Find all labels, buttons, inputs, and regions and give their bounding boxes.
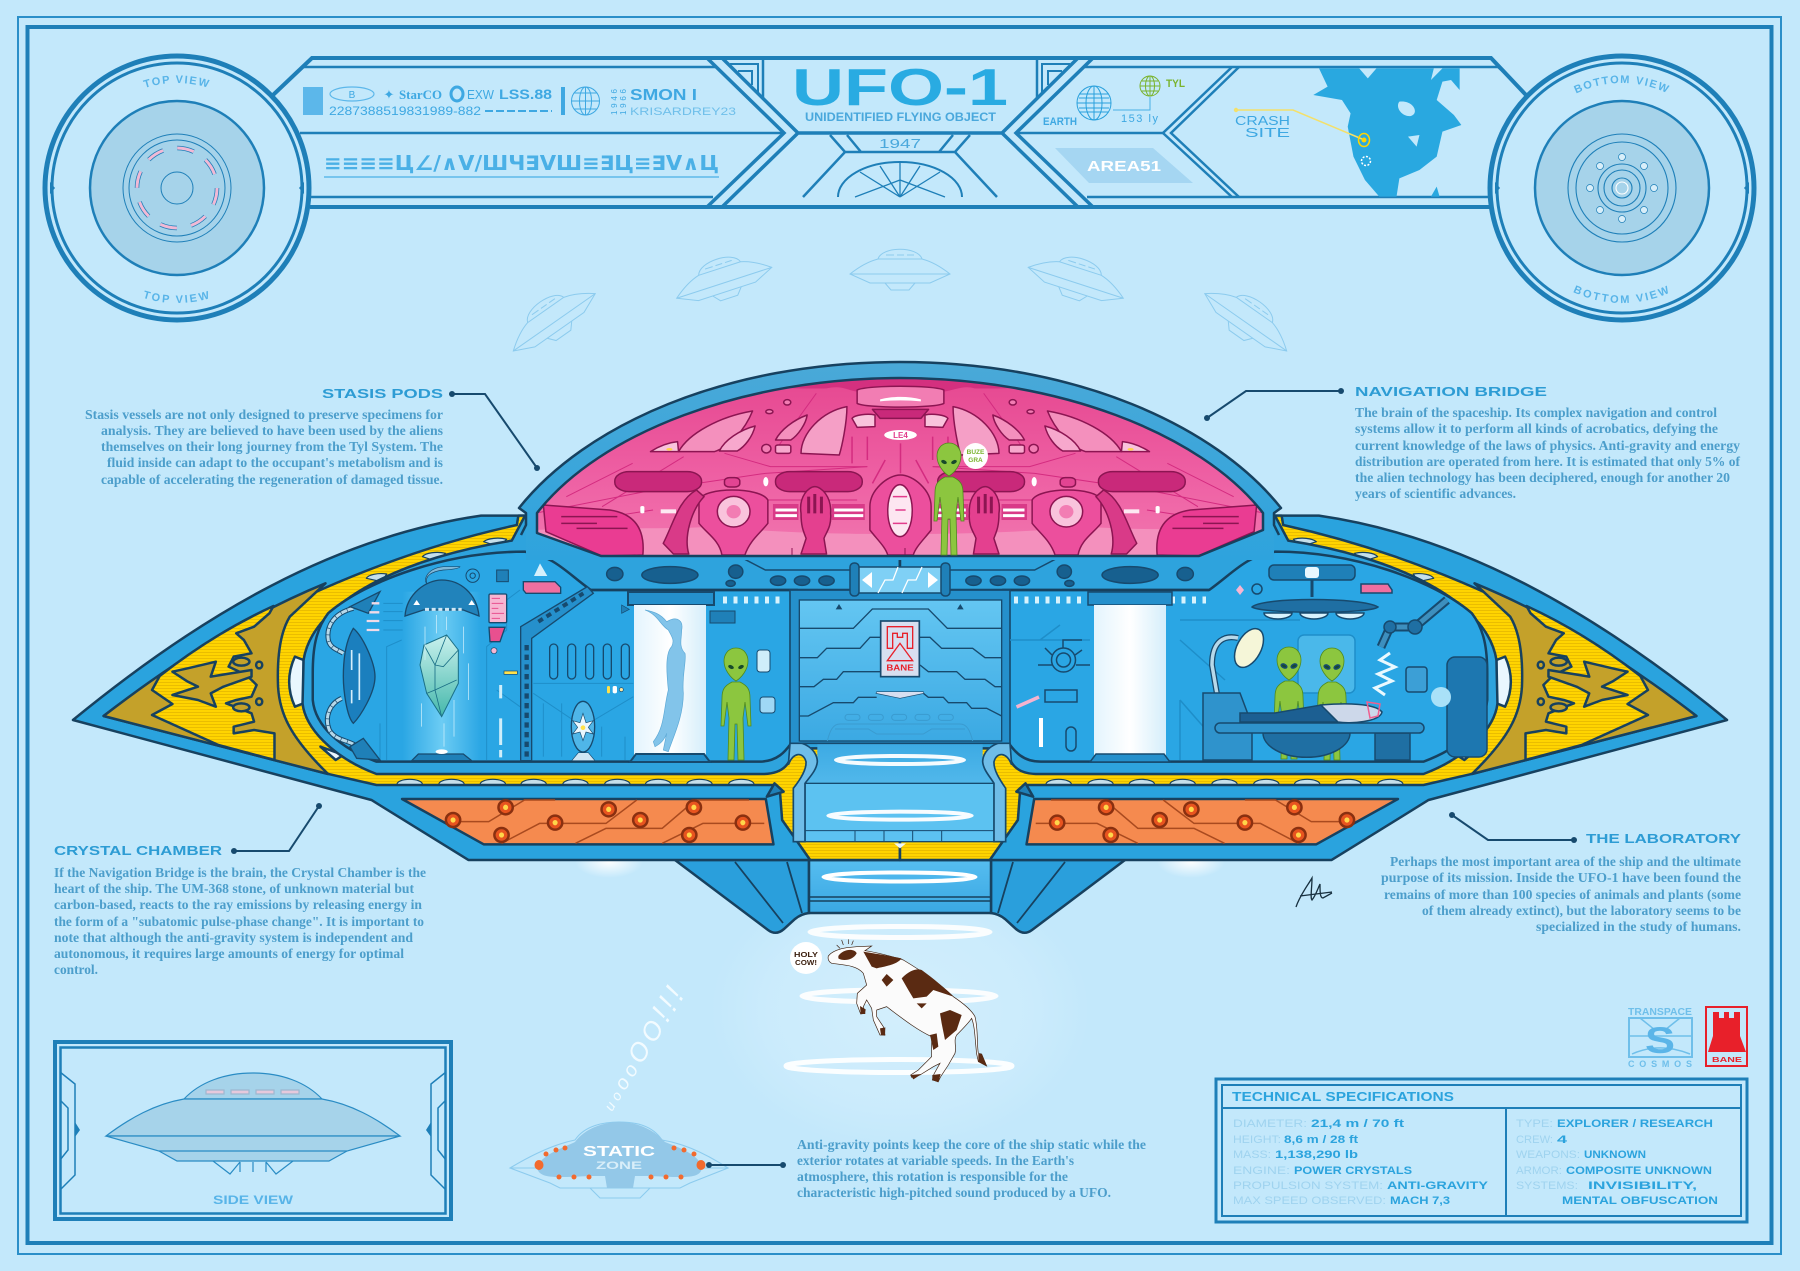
static zone diagram: STATIC [583, 1143, 655, 1160]
specs left column [1233, 1118, 1489, 1207]
central room with logo [790, 590, 1010, 743]
cow [828, 939, 987, 1082]
map of north america with crash site: SITE [1245, 125, 1290, 140]
bottom view circle: BOTTOM VIEW [1574, 75, 1670, 94]
navigation dome [519, 362, 1281, 560]
shield emblem [571, 701, 595, 761]
anti-gravity text: characteristic high-pitched sound produced by a UFO. [797, 1185, 1111, 1200]
transpace cosmos logo: S [1645, 1020, 1675, 1061]
side view panel [55, 1042, 451, 1219]
robotic arm [1381, 600, 1447, 647]
alien speech bubble: BUZE [967, 449, 985, 456]
stasis tube left with specimen [628, 592, 714, 762]
specs right column: INVISIBILITY, [1588, 1180, 1697, 1192]
header: company codes: 1946 [610, 88, 619, 115]
specs right column: MENTAL OBFUSCATION [1562, 1195, 1718, 1207]
specs right column: WEAPONS: [1516, 1149, 1580, 1161]
bottom view circle [1488, 54, 1756, 322]
specs left column: 1,138,290 lb [1275, 1149, 1358, 1161]
transpace cosmos logo [1628, 1007, 1692, 1069]
stasis pods text: Stasis vessels are not only designed to preserve specimens for [85, 407, 443, 422]
earth to tyl distance: TYL [1166, 78, 1185, 90]
stasis pods heading: STASIS PODS [322, 387, 443, 401]
side pod [1406, 657, 1487, 757]
bridge alien [934, 443, 964, 555]
specs left column: MAX SPEED OBSERVED: [1233, 1195, 1386, 1207]
title: UFO-1 [792, 59, 1008, 117]
static zone diagram: ZONE [596, 1160, 642, 1172]
navigation bridge text: the alien technology has been deciphered, enough for another 20 [1355, 470, 1730, 485]
navigation bridge leader [1204, 388, 1344, 421]
specs right column [1516, 1118, 1718, 1207]
hull left half [73, 516, 900, 860]
stasis capsule [343, 628, 375, 723]
pink control panels [489, 594, 507, 654]
holy cow bubble: HOLY [794, 952, 818, 959]
area51 tag [1055, 148, 1193, 183]
beam rings [786, 926, 1012, 1072]
lower fins and exit port [675, 860, 1125, 933]
crystal chamber interior [327, 563, 633, 761]
transpace cosmos logo: TRANSPACE [1628, 1007, 1692, 1018]
crystal [420, 635, 458, 717]
specs left column: PROPULSION SYSTEM: [1233, 1180, 1383, 1192]
header band [273, 58, 1526, 207]
header: alien script line: ≡≡≡≡Ц∠/∧V/ШЧ∃VШ≡∃Ц≡∃V∧Ц [324, 151, 719, 175]
specs right column: EXPLORER / RESEARCH [1557, 1118, 1713, 1130]
header: company codes: 1966 [619, 88, 628, 115]
operating table with patient [1203, 693, 1424, 760]
crystal chamber text: the form of a "subatomic pulse-phase change". It is important to [54, 914, 424, 929]
static zone diagram [510, 1122, 786, 1198]
laboratory text: Perhaps the most important area of the ship and the ultimate [1390, 854, 1741, 869]
header: company codes: KRISARDREY23 [630, 106, 736, 118]
artist signature [1296, 878, 1332, 907]
navigation bridge text: The brain of the spaceship. Its complex navigation and control [1355, 405, 1717, 420]
side view panel: SIDE VIEW [213, 1193, 294, 1207]
laboratory text: specialized in the study of humans. [1536, 919, 1741, 934]
navigation bridge text: systems allow it to perform all kinds of acrobatics, defying the [1355, 421, 1718, 436]
stasis pods text: themselves on their long journey from the Tyl System. The [101, 439, 443, 454]
specs right column: COMPOSITE UNKNOWN [1566, 1165, 1712, 1177]
specs right column: 4 [1557, 1134, 1568, 1146]
bulkhead column [521, 587, 593, 761]
stasis pods leader [449, 391, 540, 471]
header: company codes: LSS.88 [499, 86, 552, 102]
specs left column: DIAMETER: [1233, 1118, 1307, 1130]
specs left column: MACH 7,3 [1390, 1195, 1450, 1207]
crystal chamber text: autonomous, it requires large amounts of energy for optimal [54, 946, 404, 961]
sound effect text: uoooOO!!! [590, 981, 691, 1116]
hull right half [900, 516, 1727, 860]
stasis pods text: fluid inside can adapt to the occupant's metabolism and is [107, 455, 443, 470]
wall gauge [1038, 640, 1090, 751]
laboratory heading: THE LABORATORY [1586, 832, 1742, 846]
anti-gravity text: Anti-gravity points keep the core of the ship static while the [797, 1137, 1146, 1152]
header: company codes [303, 86, 736, 118]
neck band with vents [607, 557, 1193, 596]
crystal chamber text: heart of the ship. The UM-368 stone, of unknown material but [54, 881, 414, 896]
ceiling lamp [1252, 565, 1378, 619]
crystal chamber heading: CRYSTAL CHAMBER [54, 844, 222, 858]
lever handles [550, 644, 629, 679]
header: company codes: ✦ [384, 87, 395, 102]
alien speech bubble [963, 443, 988, 469]
specs left column: ANTI-GRAVITY [1387, 1180, 1489, 1192]
ghost ufo formation [499, 244, 1301, 364]
specs left column: 21,4 m / 70 ft [1311, 1118, 1404, 1130]
earth to tyl distance: EARTH [1043, 116, 1077, 128]
header: company codes: EXW [467, 87, 495, 102]
stasis pods text: analysis. They are believed to have been used by the aliens [101, 423, 443, 438]
stasis tube right [1088, 592, 1172, 762]
fan emblem [838, 162, 962, 197]
earth to tyl distance: 153 ly [1121, 113, 1158, 125]
laboratory text: of them already extinct), but the laboratory seems to be [1422, 903, 1741, 918]
anti-gravity text: atmosphere, this rotation is responsible for the [797, 1169, 1068, 1184]
top view circle [42, 54, 312, 322]
specs left column: 8,6 m / 28 ft [1284, 1134, 1358, 1146]
lab aliens [1274, 647, 1304, 759]
year: 1947 [879, 136, 921, 151]
specs right column: UNKNOWN [1584, 1149, 1646, 1161]
laboratory text [1381, 854, 1741, 934]
laboratory interior [1010, 565, 1487, 762]
bottom view circle: BOTTOM VIEW [1574, 285, 1668, 304]
specs right column: SYSTEMS: [1516, 1180, 1578, 1192]
header: company codes: StarCO [399, 87, 442, 102]
specs left column: ENGINE: [1233, 1165, 1290, 1177]
room logo: BANE [886, 663, 914, 673]
side view ufo [106, 1073, 400, 1174]
reactor head [405, 567, 479, 616]
laboratory leader [1449, 812, 1577, 843]
central shaft [788, 741, 1012, 848]
specs heading: TECHNICAL SPECIFICATIONS [1232, 1090, 1454, 1104]
navigation bridge text: years of scientific advances. [1355, 486, 1516, 501]
crystal chamber text: note that although the anti-gravity system is independent and [54, 930, 413, 945]
specs right column: ARMOR: [1516, 1165, 1562, 1177]
crystal chamber text: carbon-based, reacts to the ray emissions by releasing energy in [54, 897, 422, 912]
map of north america with crash site: CRASH [1235, 113, 1290, 128]
specs right column: CREW: [1516, 1134, 1553, 1146]
crystal chamber text: control. [54, 962, 98, 977]
transpace cosmos logo: COSMOS [1628, 1059, 1692, 1069]
alien speech bubble: GRA [968, 457, 983, 464]
chamber alien [721, 648, 751, 760]
red bane logo [1706, 1007, 1747, 1066]
top view circle: TOP VIEW [144, 290, 208, 303]
navigation bridge text [1355, 405, 1741, 501]
stasis pods text: capable of accelerating the regeneration of damaged tissue. [101, 472, 443, 487]
technical specifications panel [1216, 1079, 1747, 1222]
map of north america with crash site [1234, 68, 1461, 197]
area51 tag: AREA51 [1087, 158, 1161, 175]
specs right column: TYPE: [1516, 1118, 1553, 1130]
top view circle: TOP VIEW [142, 75, 210, 88]
laboratory text: remains of more than 100 species of animals and plants (some [1384, 887, 1741, 902]
holy cow bubble [790, 942, 822, 974]
chamber side panels and lights [710, 600, 1206, 713]
header: company codes: 2287388519831989-882 [329, 104, 481, 118]
navigation bridge text: current knowledge of the laws of physics. Anti-gravity and energy [1355, 438, 1740, 453]
navigation bridge heading: NAVIGATION BRIDGE [1355, 385, 1547, 399]
stasis pods text [85, 407, 443, 487]
earth to tyl distance [1043, 76, 1185, 128]
specs left column: POWER CRYSTALS [1294, 1165, 1412, 1177]
crystal chamber leader [231, 803, 322, 854]
specs left column: HEIGHT: [1233, 1134, 1281, 1146]
pink bridge interior [530, 370, 1270, 560]
laboratory text: purpose of its mission. Inside the UFO-1 have been found the [1381, 870, 1741, 885]
header: company codes: SMON I [630, 87, 697, 104]
anti-gravity text: exterior rotates at variable speeds. In the Earth's [797, 1153, 1074, 1168]
crystal chamber text [54, 865, 426, 977]
floating specimen [645, 610, 685, 752]
crystal chamber text: If the Navigation Bridge is the brain, the Crystal Chamber is the [54, 865, 426, 880]
surgical lamp [1212, 624, 1269, 700]
specs left column: MASS: [1233, 1149, 1271, 1161]
header: company codes: B [349, 90, 356, 101]
anti-gravity text [797, 1137, 1146, 1200]
holy cow bubble: COW! [795, 960, 817, 967]
red bane logo: BANE [1712, 1057, 1742, 1064]
subtitle: UNIDENTIFIED FLYING OBJECT [805, 110, 997, 124]
tractor beam glow [575, 846, 1225, 1150]
room logo [881, 621, 919, 677]
navigation bridge text: distribution are operated from here. It is estimated that only 5% of [1355, 454, 1741, 469]
navigation dome: LE4 [893, 431, 908, 440]
